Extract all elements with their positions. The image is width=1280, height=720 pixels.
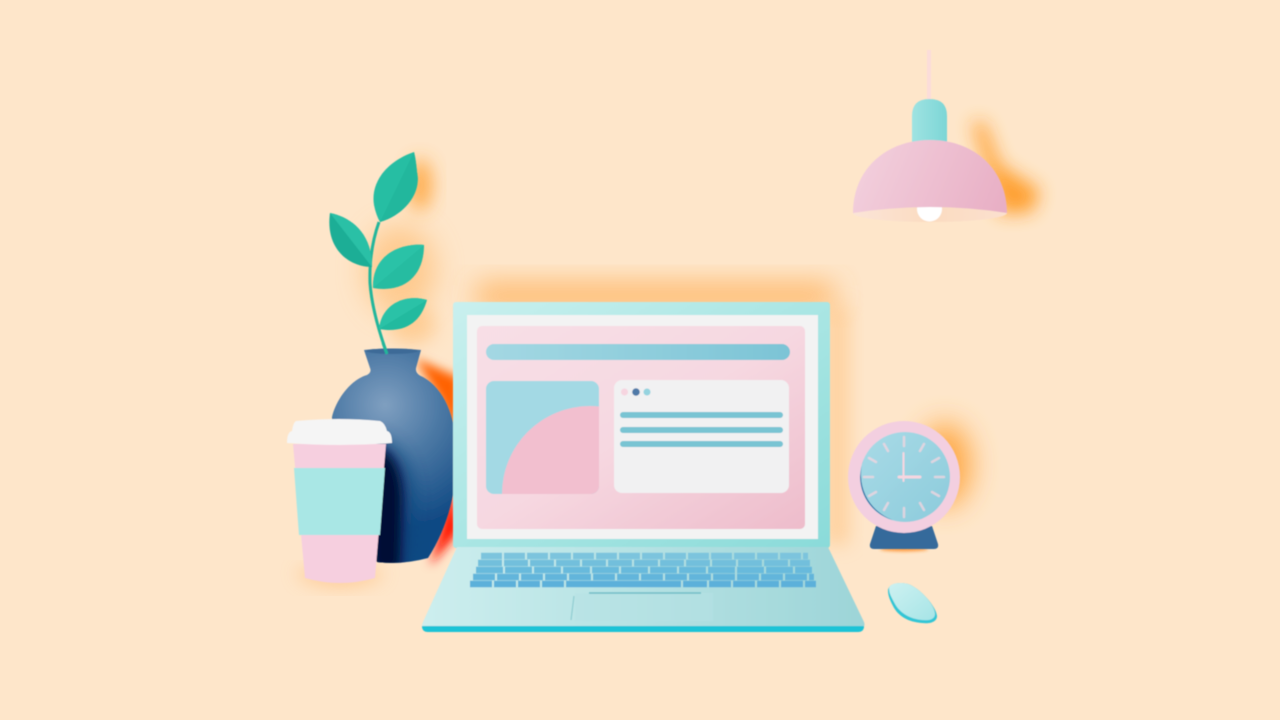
cup lid xyxy=(287,419,392,445)
leaf middle xyxy=(373,245,424,289)
keyboard xyxy=(470,556,816,584)
cup body xyxy=(293,444,386,583)
vase xyxy=(332,343,456,570)
laptop base xyxy=(422,547,864,628)
lamp xyxy=(853,50,1007,222)
lamp shade xyxy=(853,140,1007,213)
laptop front edge xyxy=(422,626,864,632)
clock ticks xyxy=(864,437,944,517)
laptop lid xyxy=(453,302,830,548)
vase cup shadow xyxy=(370,436,412,570)
leaf top xyxy=(373,152,418,222)
stem overlap xyxy=(383,343,387,354)
leaf bottom xyxy=(379,298,427,330)
lamp inner rim xyxy=(853,204,1007,222)
screen image tile xyxy=(486,380,600,494)
objects group xyxy=(287,50,1007,632)
trackpad xyxy=(571,593,713,621)
laptop screen xyxy=(467,315,818,539)
screen page xyxy=(477,326,805,529)
screen text card xyxy=(614,380,789,493)
vase neck shading xyxy=(366,348,418,354)
alarm clock xyxy=(848,421,960,549)
shadows: soft orange glows xyxy=(296,122,1040,586)
cup sleeve xyxy=(294,468,385,535)
window dots xyxy=(621,388,650,396)
illustration: desk scene xyxy=(286,50,1051,633)
leaf left xyxy=(329,213,372,267)
lamp bulb xyxy=(916,206,942,222)
screen header bar xyxy=(486,344,790,360)
stem xyxy=(370,222,387,354)
clock stand xyxy=(870,526,938,549)
plant xyxy=(329,152,427,354)
laptop xyxy=(422,302,864,632)
clock inner shadow xyxy=(860,468,892,520)
mouse xyxy=(888,583,937,623)
clock ring xyxy=(848,421,960,533)
text lines xyxy=(620,412,783,447)
coffee cup xyxy=(287,419,392,583)
clock face xyxy=(860,432,950,522)
lamp cap xyxy=(912,99,947,142)
clock hands xyxy=(899,453,920,481)
lamp cord xyxy=(927,50,931,102)
